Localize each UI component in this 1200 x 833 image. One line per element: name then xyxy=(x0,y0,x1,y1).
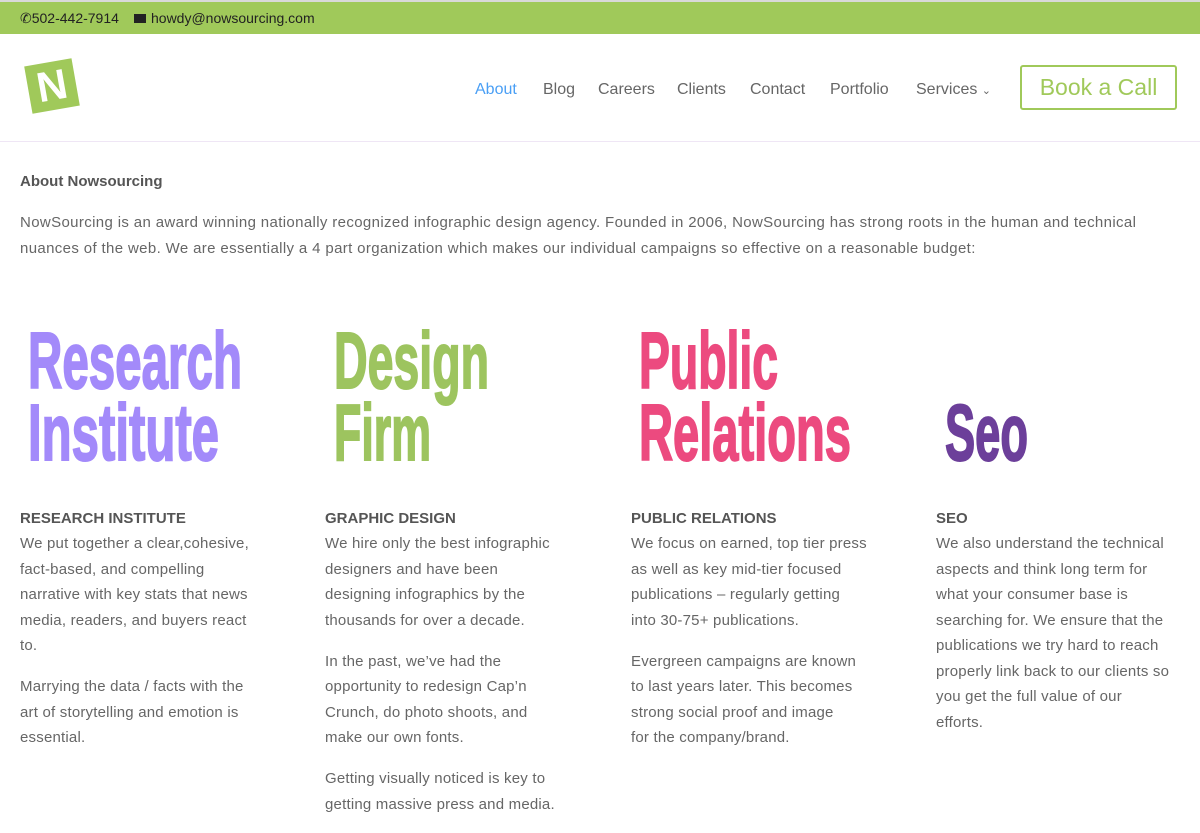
column: seo xyxy=(936,510,1169,730)
column: research institute: art of storytelling and emotion is xyxy=(20,704,239,720)
logo: N xyxy=(33,60,71,111)
column: public relations: strong social proof and image xyxy=(631,704,834,720)
intro text xyxy=(20,214,1136,256)
navigation: Blog xyxy=(543,81,575,98)
navigation: Contact xyxy=(750,81,805,98)
column: research institute: Marrying the data / facts with the xyxy=(20,678,244,695)
column: public relations: as well as key mid-tier focused xyxy=(631,560,841,578)
column: graphic design: Crunch, do photo shoots, and xyxy=(325,704,527,720)
column: research institute: We put together a clear,cohesive, xyxy=(20,535,249,552)
column: graphic design: We hire only the best infographic xyxy=(325,535,550,552)
column: public relations: PUBLIC RELATIONS xyxy=(631,510,777,527)
column: graphic design: Getting visually noticed is key to xyxy=(325,770,545,787)
column: research institute: fact-based, and compelling xyxy=(20,560,204,578)
book a call button: Book a Call xyxy=(1040,74,1157,100)
column: seo: We also understand the technical xyxy=(936,535,1164,552)
navigation: About xyxy=(475,81,517,98)
column: seo: you get the full value of our xyxy=(936,688,1122,705)
top bar xyxy=(0,0,1200,34)
contact email: howdy@nowsourcing.com xyxy=(151,10,315,26)
column: graphic design: thousands for over a decade. xyxy=(325,612,525,628)
column: graphic design xyxy=(325,510,555,812)
column: public relations: for the company/brand. xyxy=(631,729,790,746)
title: research institute xyxy=(28,316,242,477)
column: seo: efforts. xyxy=(936,714,983,730)
logo xyxy=(24,58,80,114)
column: graphic design: getting massive press and media. xyxy=(325,796,555,812)
column: seo: SEO xyxy=(936,510,968,527)
column: seo: publications we try hard to reach xyxy=(936,637,1159,654)
column: graphic design: make our own fonts. xyxy=(325,729,464,746)
column: graphic design: GRAPHIC DESIGN xyxy=(325,510,456,527)
navigation: Careers xyxy=(598,81,655,98)
column: research institute: media, readers, and buyers react xyxy=(20,612,247,628)
column: public relations: into 30-75+ publications. xyxy=(631,612,799,628)
column: seo: aspects and think long term for xyxy=(936,560,1147,578)
column: graphic design: In the past, we’ve had the xyxy=(325,652,501,670)
title: research institute: Institute xyxy=(28,388,219,477)
column: seo: what your consumer base is xyxy=(936,586,1128,603)
column: research institute: narrative with key stats that news xyxy=(20,586,248,603)
column: graphic design: designers and have been xyxy=(325,560,498,578)
title: public relations xyxy=(639,316,851,477)
intro heading: About Nowsourcing xyxy=(20,173,162,190)
column: seo: searching for. We ensure that the xyxy=(936,612,1163,628)
column: research institute: RESEARCH INSTITUTE xyxy=(20,510,186,527)
intro text: nuances of the web. We are essentially a 4 part organization which makes our individual campaigns so effective on a reasonable budget: xyxy=(20,240,976,256)
contact phone: ✆502-442-7914 xyxy=(20,10,119,26)
navigation: Portfolio xyxy=(830,81,889,98)
navigation: Clients xyxy=(677,81,726,98)
column: research institute: to. xyxy=(20,637,37,654)
navigation xyxy=(475,81,991,98)
column: public relations: Evergreen campaigns are known xyxy=(631,652,856,670)
book a call button xyxy=(1020,65,1177,110)
title: research institute: Research xyxy=(28,316,242,405)
title: design firm: Firm xyxy=(334,388,431,477)
column: research institute: essential. xyxy=(20,729,85,746)
column: public relations: We focus on earned, top tier press xyxy=(631,535,867,552)
title: public relations: Relations xyxy=(639,388,851,477)
big titles xyxy=(28,316,1028,477)
column: research institute xyxy=(20,510,249,746)
column: public relations xyxy=(631,510,867,746)
column: graphic design: designing infographics by the xyxy=(325,586,525,603)
column: public relations: publications – regularly getting xyxy=(631,586,840,603)
title: public relations: Public xyxy=(639,316,778,405)
column: public relations: to last years later. This becomes xyxy=(631,678,852,695)
title: design firm xyxy=(334,316,489,477)
column: graphic design: opportunity to redesign Cap’n xyxy=(325,678,527,695)
intro text: NowSourcing is an award winning nationally recognized infographic design agency. Founded in 2006, NowSourcing has strong roots in the human and technical xyxy=(20,214,1136,231)
navigation: Services ⌄ xyxy=(916,81,991,98)
title: seo: Seo xyxy=(945,388,1028,477)
column: seo: properly link back to our clients so xyxy=(936,662,1169,680)
title: design firm: Design xyxy=(334,316,489,405)
